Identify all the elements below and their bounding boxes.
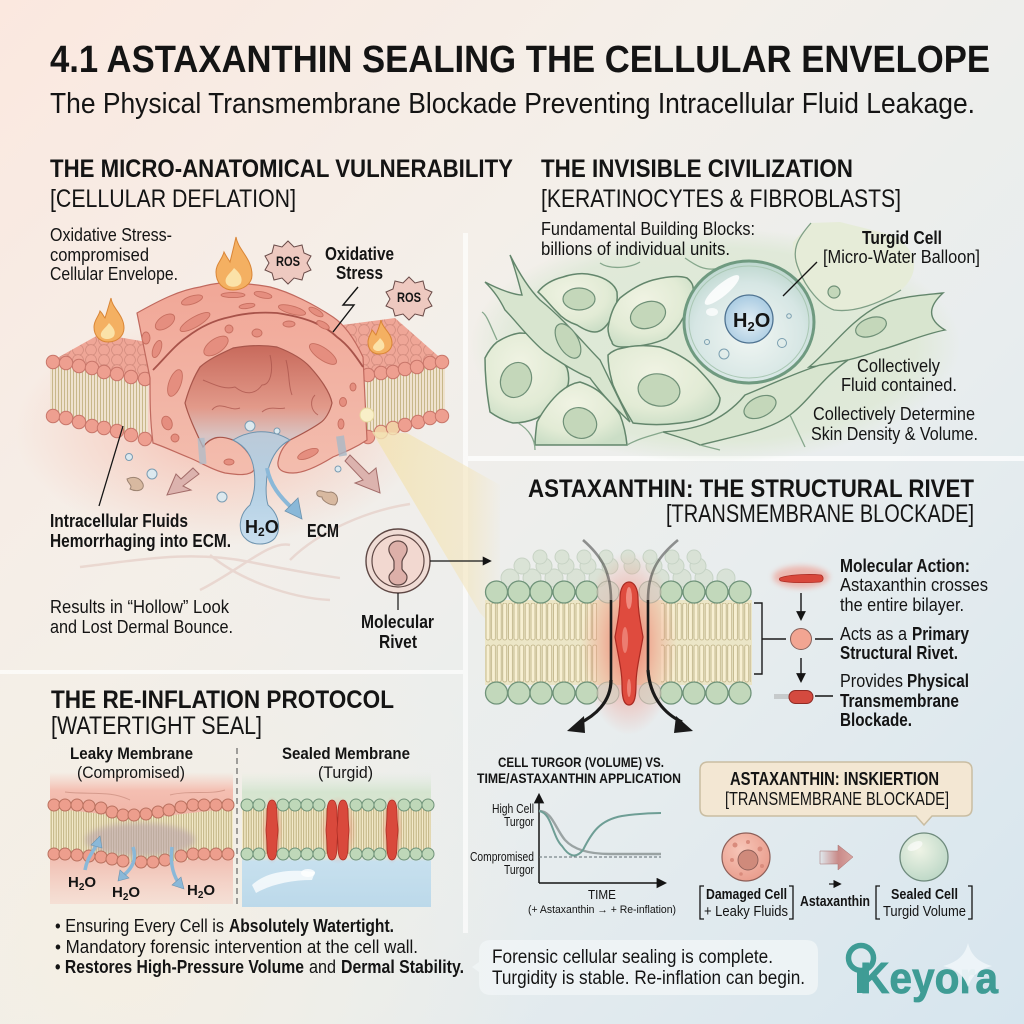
dashed divider [236,748,238,907]
chart: cell turgor vs time [470,754,681,916]
icon: rivet bead [790,628,812,650]
leak arrows [85,836,184,889]
H2O labels: 2 [123,892,129,903]
H2O labels: H [112,884,123,901]
panel: invisible civilization [470,155,980,463]
x axis label: TIME [588,887,616,902]
label: oxidative stress [325,244,394,283]
text block: fluid contained: Fluid contained. [841,375,957,395]
bubbles [126,421,341,502]
bullet list: and [309,956,336,977]
arrow: down 2 [800,658,802,681]
axes [539,795,665,883]
H2O labels: H [187,882,198,899]
text block: compromised envelope: Cellular Envelope. [50,264,178,284]
label: molecular rivet: Molecular [361,612,434,632]
label: intracellular fluids: Intracellular Fluids [50,511,188,531]
H2O labels: H [68,874,79,891]
H2O labels: 2 [198,890,204,901]
label: intracellular fluids [50,511,231,551]
y axis labels: High Cell [492,802,534,816]
label: oxidative stress: Oxidative [325,244,394,264]
curve: untreated [539,811,661,854]
arrow: damaged to sealed [820,845,853,870]
panel: micro-anatomical vulnerability [15,155,513,652]
text block: blockade: Transmembrane [840,691,959,711]
text block: building blocks [541,219,755,259]
decorative dermal fibres [80,504,410,600]
label: sealed cell: Turgid Volume [883,903,966,920]
pink leakage glow [15,315,425,545]
top-right cell outline [795,223,901,311]
ROS badge 2 [386,277,432,320]
H2O bubble: H [733,310,747,332]
ROS badge 1: ROS [276,253,300,269]
small arrow [829,883,840,885]
label: damaged cell: + Leaky Fluids [704,903,788,920]
callout: insertion: [TRANSMEMBRANE BLOCKADE] [725,789,949,809]
text block: fluid contained [841,356,957,395]
ROS badge 1 [265,241,311,284]
label: sealed membrane: Sealed Membrane [282,744,410,763]
text block: building blocks: billions of individual units. [541,239,730,259]
label: H2O drop: O [265,517,279,537]
heading: civilization: THE INVISIBLE CIVILIZATION [541,155,853,183]
label: molecular rivet [361,612,434,652]
bullet list: • Restores High-Pressure Volume [55,956,304,977]
H2O labels: O [128,884,140,901]
y axis labels: Compromised [470,850,534,864]
text block: skin density [811,404,978,444]
text block: hollow look: Results in “Hollow” Look [50,597,230,617]
status message box: Forensic cellular sealing is complete. [492,947,773,968]
heading: re-inflation: [WATERTIGHT SEAL] [51,712,262,740]
arrows: pink outflow [167,455,380,495]
bullet list: Absolutely Watertight. [229,915,394,936]
text block: molecular action: the entire bilayer. [840,595,964,615]
label: turgid cell [823,228,980,267]
label: molecular rivet: Rivet [379,632,417,652]
text block: molecular action [840,556,988,615]
diagram: sealed membrane [241,772,434,907]
text block: blockade [840,671,969,730]
status message box: Turgidity is stable. Re-inflation can begin. [492,968,805,989]
H2O labels: O [84,874,96,891]
leader line to fluids label [99,426,123,506]
label: H2O drop: H [245,517,258,537]
illustration: damaged membrane [46,237,500,635]
diagram: leaky membrane [48,772,234,904]
back rows [501,550,735,587]
turgid cell [684,261,814,383]
H2O labels [68,874,215,903]
organelles [142,290,356,465]
cavity folds [203,355,318,415]
text block: blockade: Physical [907,671,969,691]
lightning bolt leader [333,287,358,332]
icon: molecular rivet [366,529,430,610]
text block: compromised envelope: compromised [50,245,149,265]
y axis labels: Turgor [504,863,534,877]
heading: vulnerability: [CELLULAR DEFLATION] [50,185,296,213]
debris [127,477,338,505]
flame right [368,320,392,354]
bullet list [55,915,464,977]
label: sealed membrane [282,744,410,782]
icon: lozenge molecule [773,566,829,588]
text block: primary rivet: Primary [912,624,969,644]
label: damaged cell: Damaged Cell [706,886,787,903]
astaxanthin rivet molecule [615,582,643,705]
heading: re-inflation [51,686,394,740]
left lipid block [46,334,165,446]
status message box [472,940,818,995]
compromised reference line [539,856,661,858]
chart title: TIME/ASTAXANTHIN APPLICATION [477,770,681,786]
curve: treated [539,811,661,856]
connector line 1 [815,638,833,640]
right lipid block [342,318,449,444]
text block: skin density: Skin Density & Volume. [811,424,978,444]
label: intracellular fluids: Hemorrhaging into ECM. [50,531,231,551]
label: damaged cell [700,886,793,920]
text block: compromised envelope [50,225,178,284]
arrow: down 1 [800,593,802,619]
leader line to turgid cell [783,262,817,296]
heading: vulnerability [50,155,513,213]
text block: fluid contained: Collectively [857,356,940,376]
leaking water stream and drop [201,432,343,544]
heading: vulnerability: THE MICRO-ANATOMICAL VULNERABILITY [50,155,513,183]
panel: re-inflation protocol [48,686,464,977]
heading: civilization: [KERATINOCYTES & FIBROBLASTS] [541,185,901,213]
red glow [581,551,677,735]
lipid heads [486,581,751,704]
bullet list: • Ensuring Every Cell is [55,915,224,936]
label: sealed membrane: (Turgid) [318,763,373,782]
text block: primary rivet [840,624,969,663]
tails [485,600,752,685]
label: leaky membrane: (Compromised) [77,763,185,782]
text block: hollow look [50,597,233,637]
top-right cell [792,222,914,311]
H2O labels: 2 [79,882,85,893]
callout: insertion [700,762,972,825]
label: H2O drop: 2 [258,525,265,539]
text block: building blocks: Fundamental Building Blocks: [541,219,755,239]
label: leaky membrane [70,744,193,782]
green cell tissue [470,222,960,463]
logo: Keyora: Keyora [860,954,998,1003]
text block: blockade: Provides [840,671,903,691]
x axis note: (+ Astaxanthin → + Re-inflation) [528,904,676,916]
cavity [185,346,332,470]
cell branches [482,258,805,450]
panel: structural rivet [470,475,988,920]
glowing spot on membrane [360,408,374,422]
label: sealed cell: Sealed Cell [891,886,958,903]
icon: sealed cell [900,833,948,881]
yellow magnification beam [372,432,500,635]
text block: molecular action: Molecular Action: [840,556,970,576]
chart title: CELL TURGOR (VOLUME) VS. [498,754,664,770]
chart title [477,754,681,786]
flame left [94,298,124,342]
H2O bubble: 2 [747,319,755,334]
text block: blockade: Blockade. [840,710,912,730]
label: oxidative stress: Stress [336,263,383,283]
heading: re-inflation: THE RE-INFLATION PROTOCOL [51,686,394,714]
ruptured envelope blob [137,283,367,475]
icon: damaged cell [722,833,770,881]
heading: rivet: ASTAXANTHIN: THE STRUCTURAL RIVET [528,475,974,503]
text block: hollow look: and Lost Dermal Bounce. [50,617,233,637]
label: ECM: ECM [307,521,339,541]
connector line 2 [815,695,833,697]
y axis labels [470,802,534,877]
inner arch line [153,313,363,370]
ROS badge 2: ROS [397,289,421,305]
text block: compromised envelope: Oxidative Stress- [50,225,172,245]
flame top [216,237,252,290]
membrane with rivet [485,540,752,735]
label: turgid cell: Turgid Cell [862,228,942,248]
icon: capsule [774,690,813,704]
text block: skin density: Collectively Determine [813,404,975,424]
arrow: rivet to membrane [430,560,490,562]
label: sealed cell [876,886,972,920]
H2O bubble: O [755,310,770,332]
label: astaxanthin: Astaxanthin [800,893,870,910]
curved black arrows [578,540,682,724]
callout: insertion: ASTAXANTHIN: INSKIERTION [730,769,939,789]
bullet list: Dermal Stability. [341,956,464,977]
text block: primary rivet: Acts as a [840,624,908,644]
bullet list: • Mandatory forensic intervention at the cell wall. [55,936,418,957]
fibroblasts [485,255,945,445]
text block: molecular action: Astaxanthin crosses [840,575,988,595]
nuclei [495,286,889,444]
text block: primary rivet: Structural Rivet. [840,643,958,663]
mechanism icons [773,566,833,704]
label: turgid cell: [Micro-Water Balloon] [823,247,980,267]
arrow: blue leak to ECM [267,468,302,519]
y axis labels: Turgor [504,815,534,829]
label: leaky membrane: Leaky Membrane [70,744,193,763]
keratinocytes [485,274,720,445]
bracket and connector [754,603,786,674]
heading: civilization [541,155,901,213]
H2O labels: O [203,882,215,899]
heading: rivet [528,475,974,528]
H2O bubble [725,295,773,343]
